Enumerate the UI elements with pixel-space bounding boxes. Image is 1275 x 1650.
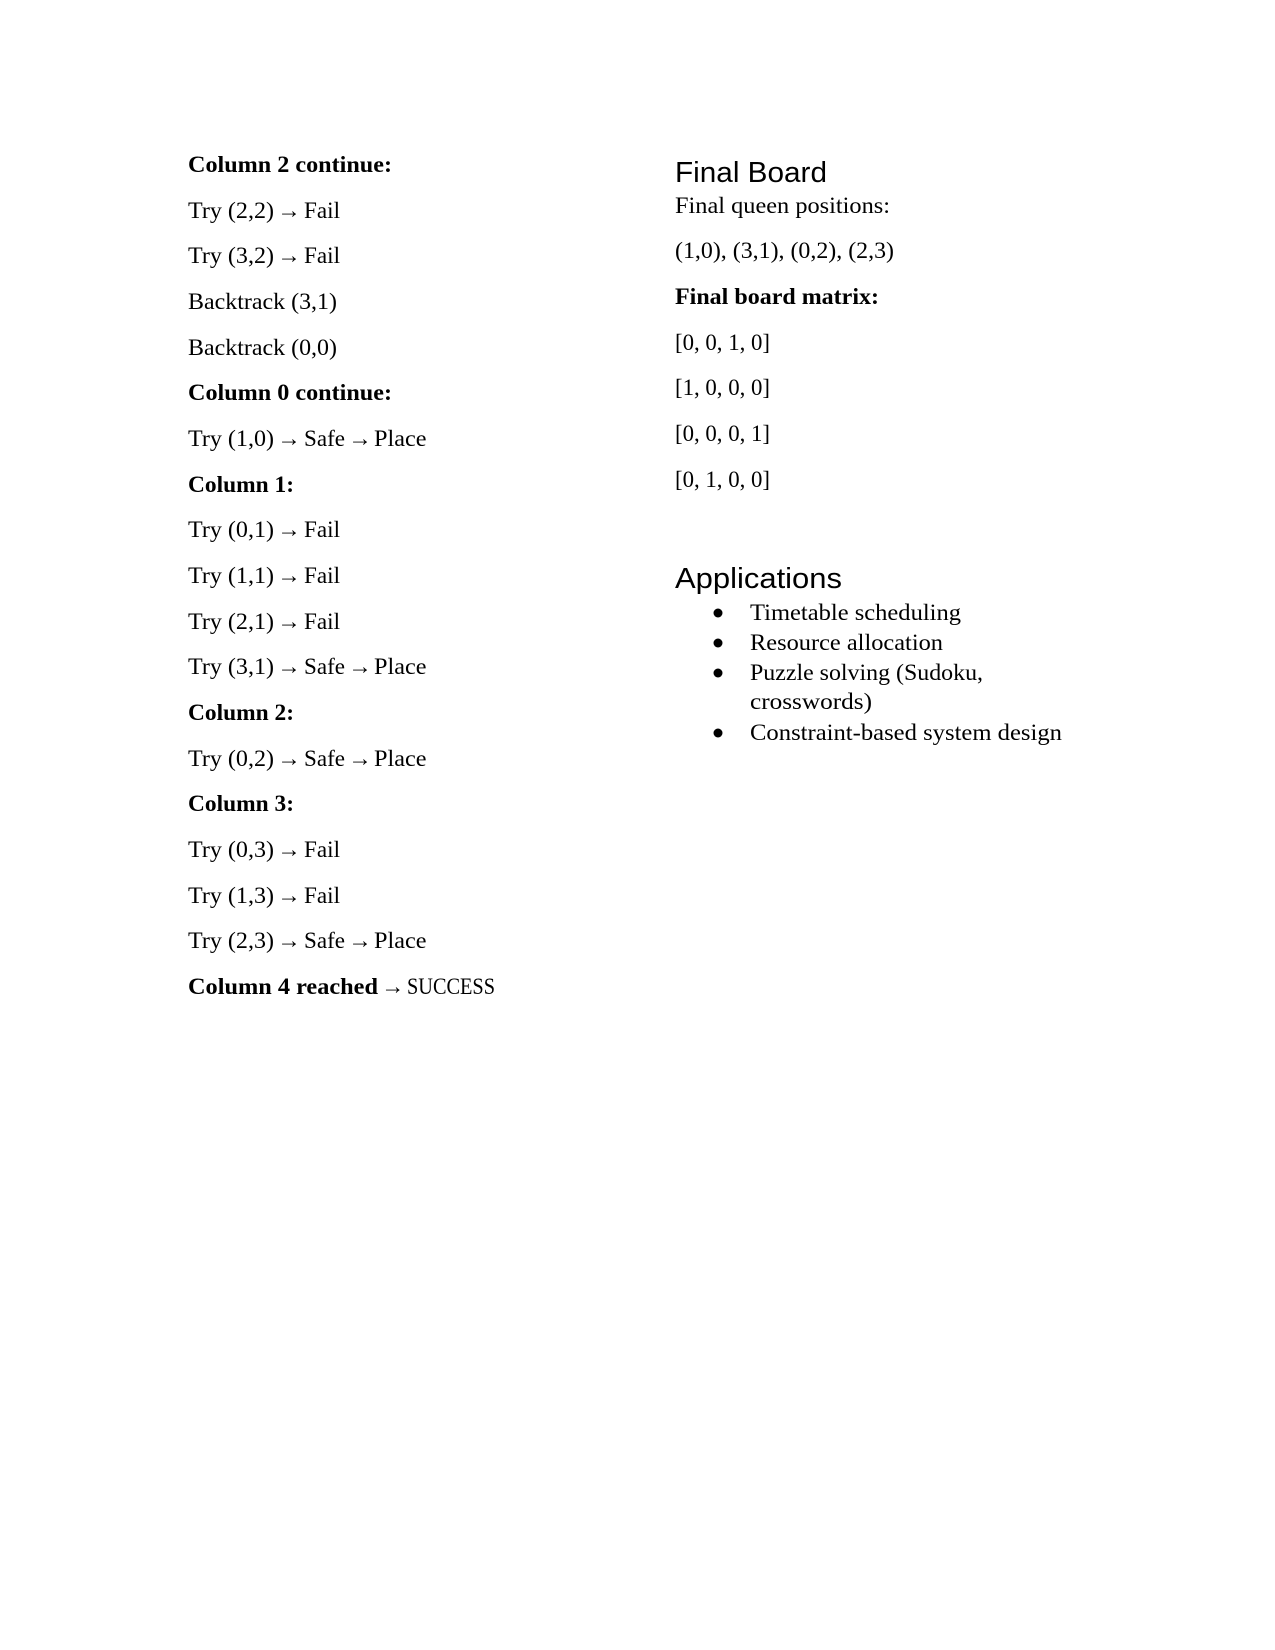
- step: Try (3,2) fails: Fail: [304, 243, 340, 268]
- list item: resource allocation: Resource allocation: [750, 630, 944, 655]
- step: Try (3,2) fails: Try (3,2): [188, 243, 274, 268]
- step: Try (0,3) fails: →: [277, 837, 301, 862]
- step: Try (0,2) safe, place: [188, 746, 426, 771]
- step: Try (2,1) fails: →: [277, 609, 301, 634]
- step: Try (0,3) fails: Try (0,3): [188, 837, 274, 862]
- step: Backtrack (0,0): Backtrack (0,0): [188, 335, 337, 360]
- result: Column 4 reached, success: SUCCESS: [407, 974, 495, 999]
- panel: applications: [675, 563, 1063, 745]
- step: Try (1,0) safe, place: →: [348, 426, 372, 451]
- heading: Column 0 continue: Column 0 continue:: [188, 380, 392, 405]
- heading: Column 2: Column 2:: [188, 700, 294, 725]
- step: Try (3,2) fails: [188, 243, 340, 268]
- heading: Final Board: Final Board: [675, 157, 827, 189]
- step: Try (1,1) fails: Fail: [304, 563, 340, 588]
- step: Try (2,1) fails: Fail: [304, 609, 340, 634]
- step: Try (1,1) fails: Try (1,1): [188, 563, 274, 588]
- step: Try (2,1) fails: [188, 609, 340, 634]
- step: Try (0,3) fails: [188, 837, 340, 862]
- step: Try (2,2) fails: →: [277, 198, 301, 223]
- step: Try (1,0) safe, place: Place: [374, 426, 426, 451]
- step: Try (0,2) safe, place: →: [277, 746, 301, 771]
- heading: Column 2 continue: Column 2 continue:: [188, 152, 392, 177]
- result: Column 4 reached, success: →: [381, 974, 404, 999]
- step: Try (3,1) safe, place: →: [277, 654, 301, 679]
- step: Try (1,0) safe, place: →: [277, 426, 301, 451]
- list item: constraint-based system design: Constraint-based system design: [750, 720, 1063, 745]
- step: Try (2,3) safe, place: →: [348, 928, 372, 953]
- panel: backtracking trace, left column: [188, 152, 495, 999]
- heading: Column 1: Column 1:: [188, 472, 294, 497]
- heading: Final board matrix: Final board matrix:: [675, 284, 879, 309]
- heading: Applications: Applications: [675, 563, 842, 595]
- step: Try (2,3) safe, place: [188, 928, 426, 953]
- panel: final board: [675, 157, 894, 492]
- matrix row 4: [0, 1, 0, 0]: [675, 467, 770, 492]
- list item: puzzle solving: Puzzle solving (Sudoku,: [750, 660, 983, 685]
- heading: Column 3: Column 3:: [188, 791, 294, 816]
- list item: puzzle solving: crosswords): [750, 689, 872, 714]
- step: Try (2,2) fails: Try (2,2): [188, 198, 274, 223]
- step: Try (1,0) safe, place: Safe: [304, 426, 345, 451]
- step: Try (1,0) safe, place: [188, 426, 426, 451]
- step: Try (2,3) safe, place: Try (2,3): [188, 928, 274, 953]
- step: Try (1,3) fails: →: [277, 883, 301, 908]
- step: Try (1,3) fails: Fail: [304, 883, 340, 908]
- step: Try (0,2) safe, place: Place: [374, 746, 426, 771]
- step: Try (2,3) safe, place: Place: [374, 928, 426, 953]
- step: Try (0,3) fails: Fail: [304, 837, 340, 862]
- step: Try (1,3) fails: Try (1,3): [188, 883, 274, 908]
- result: Column 4 reached, success: [188, 974, 495, 999]
- step: Try (3,1) safe, place: Safe: [304, 654, 345, 679]
- step: Try (2,1) fails: Try (2,1): [188, 609, 274, 634]
- step: Try (0,1) fails: Fail: [304, 517, 340, 542]
- text: final queen positions values: (1,0), (3,1), (0,2), (2,3): [675, 238, 894, 263]
- step: Try (2,2) fails: [188, 198, 340, 223]
- step: Try (0,2) safe, place: Try (0,2): [188, 746, 274, 771]
- step: Try (3,1) safe, place: Place: [374, 654, 426, 679]
- step: Try (1,1) fails: →: [277, 563, 301, 588]
- step: Try (3,1) safe, place: [188, 654, 426, 679]
- step: Try (1,1) fails: [188, 563, 340, 588]
- step: Try (2,2) fails: Fail: [304, 198, 340, 223]
- step: Try (0,1) fails: →: [277, 517, 301, 542]
- step: Try (2,3) safe, place: →: [277, 928, 301, 953]
- step: Try (3,2) fails: →: [277, 243, 301, 268]
- list item: timetable scheduling: Timetable scheduling: [750, 600, 962, 625]
- step: Try (0,2) safe, place: →: [348, 746, 372, 771]
- step: Try (3,1) safe, place: Try (3,1): [188, 654, 274, 679]
- list item: puzzle solving: [714, 660, 983, 714]
- matrix row 1: [0, 0, 1, 0]: [675, 330, 770, 355]
- step: Try (0,1) fails: [188, 517, 340, 542]
- step: Try (0,2) safe, place: Safe: [304, 746, 345, 771]
- text: final queen positions label: Final queen positions:: [675, 193, 890, 218]
- step: Try (2,3) safe, place: Safe: [304, 928, 345, 953]
- step: Try (1,0) safe, place: Try (1,0): [188, 426, 274, 451]
- step: Try (1,3) fails: [188, 883, 340, 908]
- step: Backtrack (3,1): Backtrack (3,1): [188, 289, 337, 314]
- step: Try (3,1) safe, place: →: [348, 654, 372, 679]
- matrix row 2: [1, 0, 0, 0]: [675, 375, 770, 400]
- step: Try (0,1) fails: Try (0,1): [188, 517, 274, 542]
- matrix row 3: [0, 0, 0, 1]: [675, 421, 770, 446]
- result: Column 4 reached, success: Column 4 reached: [188, 974, 378, 999]
